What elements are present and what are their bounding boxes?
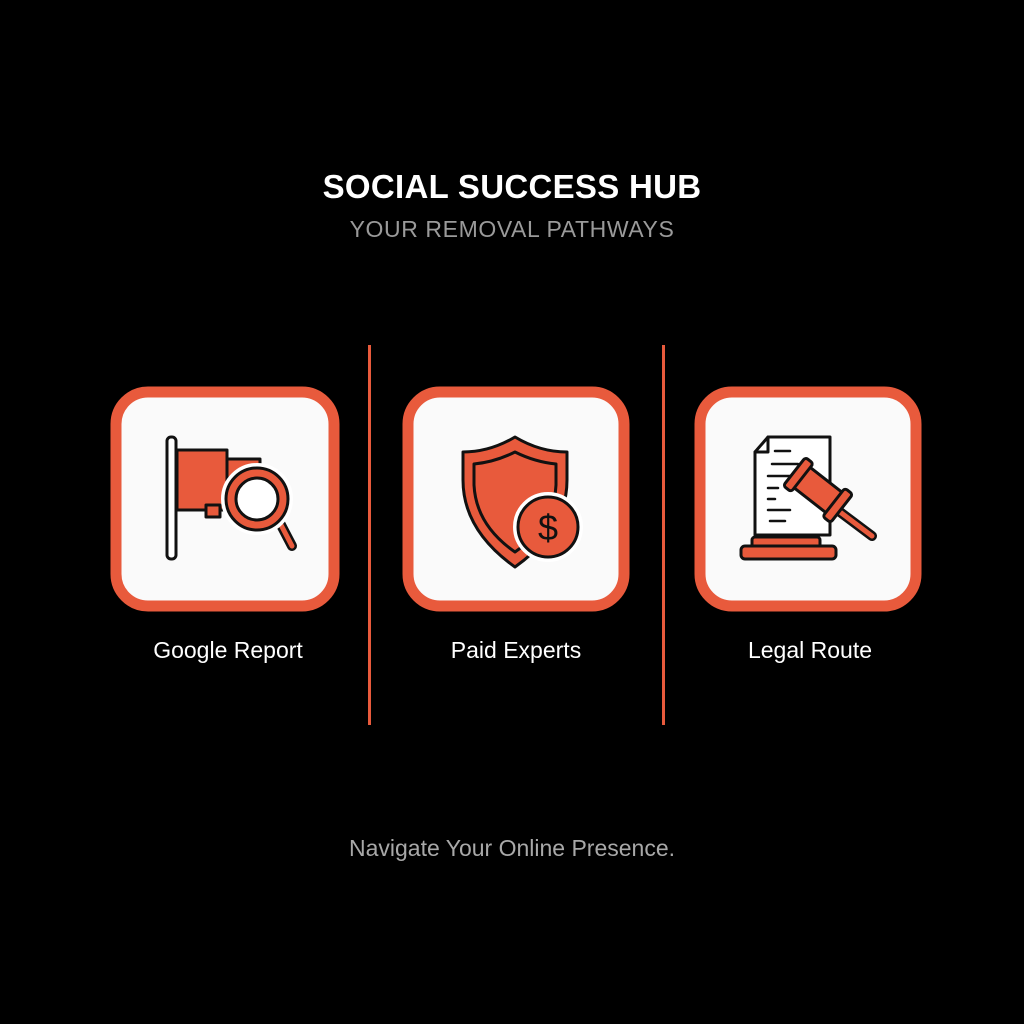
divider 1 bbox=[368, 345, 371, 725]
label: google report: Google Report bbox=[153, 637, 303, 663]
card: google report bbox=[116, 392, 334, 606]
title: SOCIAL SUCCESS HUB bbox=[323, 168, 701, 205]
card: legal route bbox=[700, 392, 916, 606]
subtitle: YOUR REMOVAL PATHWAYS bbox=[350, 216, 674, 242]
icon: document and gavel bbox=[741, 437, 872, 559]
label: paid experts: Paid Experts bbox=[451, 637, 581, 663]
icon: flag with magnifier bbox=[167, 437, 292, 559]
icon: shield with dollar coin bbox=[463, 437, 579, 567]
icon: shield with dollar coin: $ bbox=[538, 507, 558, 548]
card: paid experts bbox=[408, 392, 624, 606]
label: legal route: Legal Route bbox=[748, 637, 872, 663]
divider 2 bbox=[662, 345, 665, 725]
footer tagline: Navigate Your Online Presence. bbox=[349, 835, 675, 861]
